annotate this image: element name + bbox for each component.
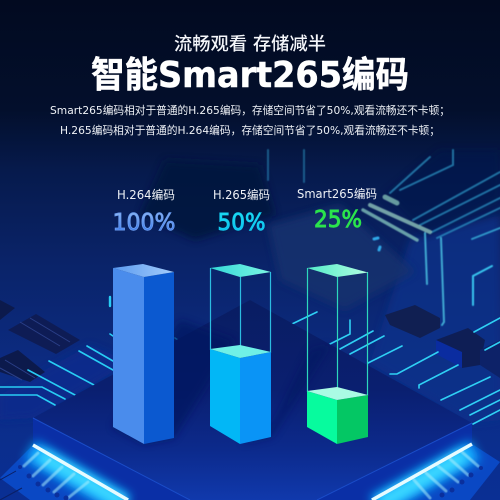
label: H.264 [112,187,176,236]
main title: 智能Smart265编码 [91,55,409,96]
glowing chip edges [0,444,500,500]
label: Smart265 [297,186,377,233]
circuit traces: left [0,297,181,405]
bar: H.265 50% [210,264,271,444]
label: Smart265: Smart265编码 [297,186,377,201]
glass outline [308,268,368,396]
description: Smart265编码相对于普通的H.265编码，存储空间节省了50%,观看流畅还不卡顿； [50,103,450,117]
chips: small dark components [0,300,500,382]
label: H.265: 50% [218,210,266,236]
description: H.265编码相对于普通的H.264编码，存储空间节省了50%,观看流畅还不卡顿； [60,123,440,137]
label: H.265 [213,187,270,236]
label: H.264: H.264编码 [117,187,175,202]
chip platform [33,300,472,500]
label: H.264: 100% [112,210,176,236]
glass outline [210,268,270,353]
subtitle: 流畅观看 存储减半 [174,34,326,55]
circuit traces: right [292,312,500,424]
description [50,103,450,137]
bar: H.264 100% [113,264,174,444]
bar: Smart265 25% [307,264,368,444]
label: Smart265: 25% [314,207,362,233]
label: H.265: H.265编码 [213,187,270,202]
circuit traces: upper right [268,150,500,325]
